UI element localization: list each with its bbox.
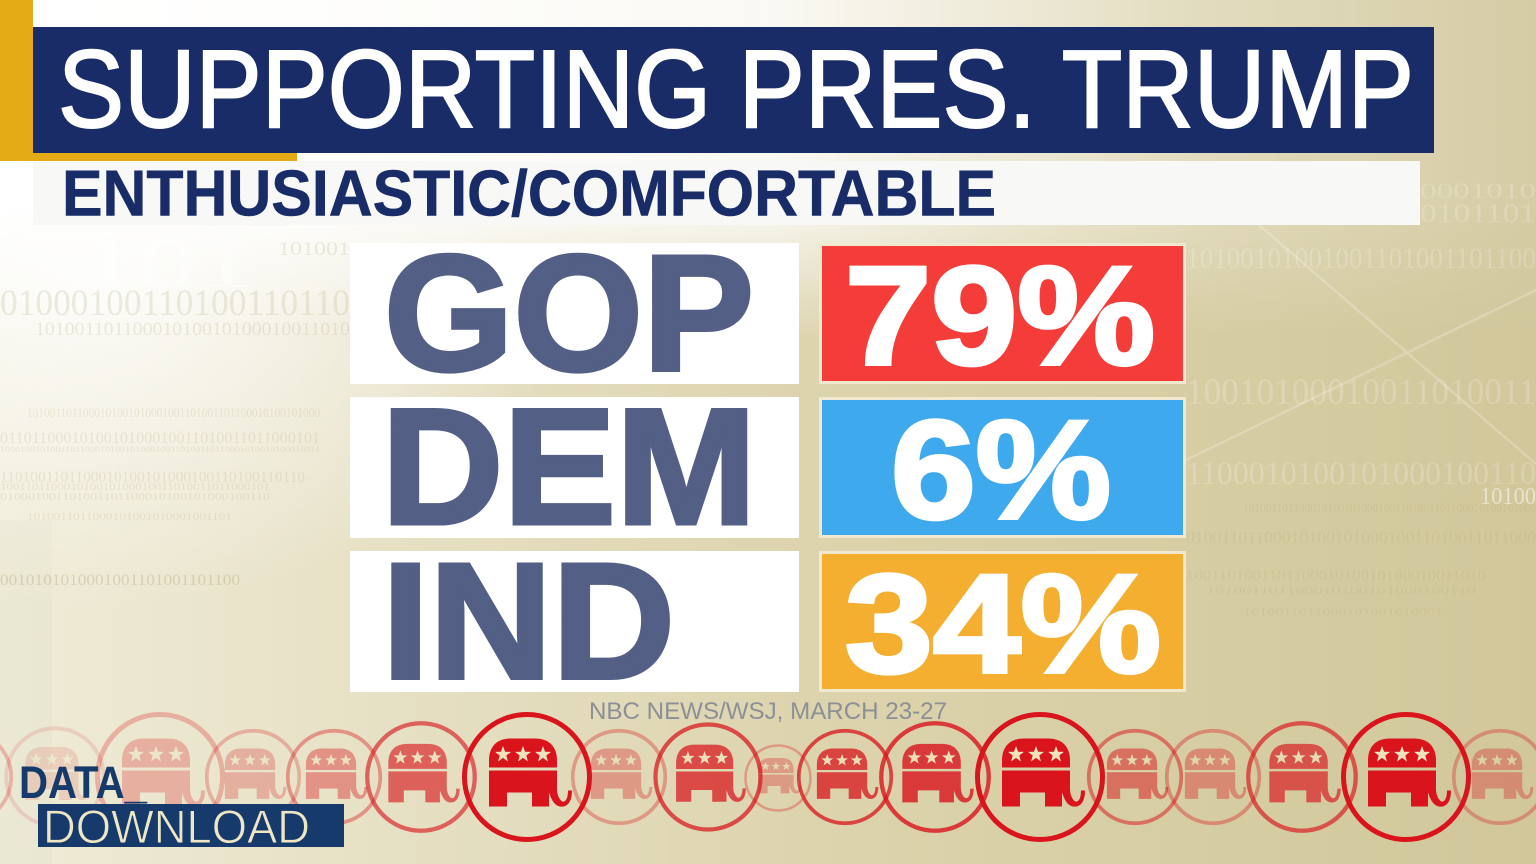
icon: elephant badge 8	[573, 731, 665, 823]
binary texture: 100110100110110001010010100010011010	[1186, 568, 1486, 584]
binary texture: 0001010	[1420, 178, 1536, 203]
label: DEM: DEM	[382, 374, 756, 558]
title bar	[33, 27, 1434, 153]
binary texture: 0100110110001010010100010011010011011000	[1186, 528, 1536, 547]
elephant badge row	[0, 714, 1536, 840]
binary texture: 1010011011000101001010001001101	[27, 511, 232, 523]
row: GOP	[350, 221, 1184, 405]
value: GOP 79%: 79%	[845, 237, 1155, 394]
binary texture: 100110110001010010100010011010011011000101	[0, 481, 270, 493]
binary texture: 1000100101001101100010100101000100110100110110001010010100010011	[0, 445, 320, 454]
logo word: DATA_: DATA_	[19, 757, 148, 808]
row: IND	[350, 529, 1184, 713]
binary texture: 0101101	[1420, 199, 1536, 228]
label: GOP: GOP	[384, 221, 754, 405]
binary texture: 101	[80, 226, 255, 303]
icon: elephant badge 17	[1344, 714, 1468, 840]
source note: NBC NEWS/WSJ, MARCH 23-27	[589, 698, 947, 725]
binary texture: 1100010100101000100110	[1186, 456, 1536, 492]
icon: elephant badge 9	[656, 724, 760, 830]
icon: elephant badge 6	[367, 723, 475, 831]
icon: elephant badge 5	[288, 731, 380, 823]
icon: elephant badge 15	[1167, 731, 1259, 823]
icon: elephant badge 10	[746, 746, 810, 810]
gold accent bar	[0, 0, 297, 161]
binary texture: 0010101010001001101001101100	[0, 572, 240, 589]
icon: elephant badge 1	[0, 731, 11, 823]
value: IND 34%: 34%	[845, 545, 1161, 702]
binary texture: 010001001101001101100010100101000100110	[0, 491, 271, 503]
icon: elephant badge 13	[978, 714, 1102, 840]
subtitle bar	[33, 156, 1420, 230]
binary texture: 0110110001010010100010011010011011000101	[0, 430, 320, 447]
icon: elephant badge 18	[1454, 731, 1536, 823]
icon: elephant badge 3	[98, 714, 222, 840]
icon: elephant badge 4	[207, 731, 299, 823]
binary texture: 101001	[278, 238, 350, 260]
binary texture: 01000100110100110110	[0, 283, 350, 324]
subtitle: ENTHUSIASTIC/COMFORTABLE	[62, 156, 996, 230]
value: DEM 6%: 6%	[891, 391, 1111, 548]
icon: elephant badge 7	[464, 714, 590, 840]
binary texture: 101001101100010100101000100110	[1206, 585, 1477, 597]
icon: elephant badge 14	[1089, 731, 1181, 823]
icon: elephant badge 12	[881, 723, 989, 831]
logo: Data Download	[19, 757, 344, 853]
logo box: DOWNLOAD: DOWNLOAD	[43, 800, 310, 853]
value: DEM 6%	[820, 391, 1184, 548]
binary texture: 10100110110001010010100010011010	[35, 319, 350, 340]
binary texture: 1101001101100010100101000100110100110110	[0, 469, 305, 486]
binary texture	[0, 178, 1536, 618]
icon: elephant badge 2	[6, 728, 104, 826]
row: DEM	[350, 374, 1184, 558]
title: SUPPORTING PRES. TRUMP	[58, 28, 1414, 151]
icon: elephant badge 16	[1248, 723, 1356, 831]
label: IND: IND	[382, 529, 675, 713]
label: IND	[350, 529, 799, 713]
binary texture: 1010011011000101001010001	[1243, 606, 1443, 618]
binary texture: 1010011011000101001010001001101001101100010100101000	[27, 405, 320, 420]
icon: elephant badge 11	[799, 731, 891, 823]
